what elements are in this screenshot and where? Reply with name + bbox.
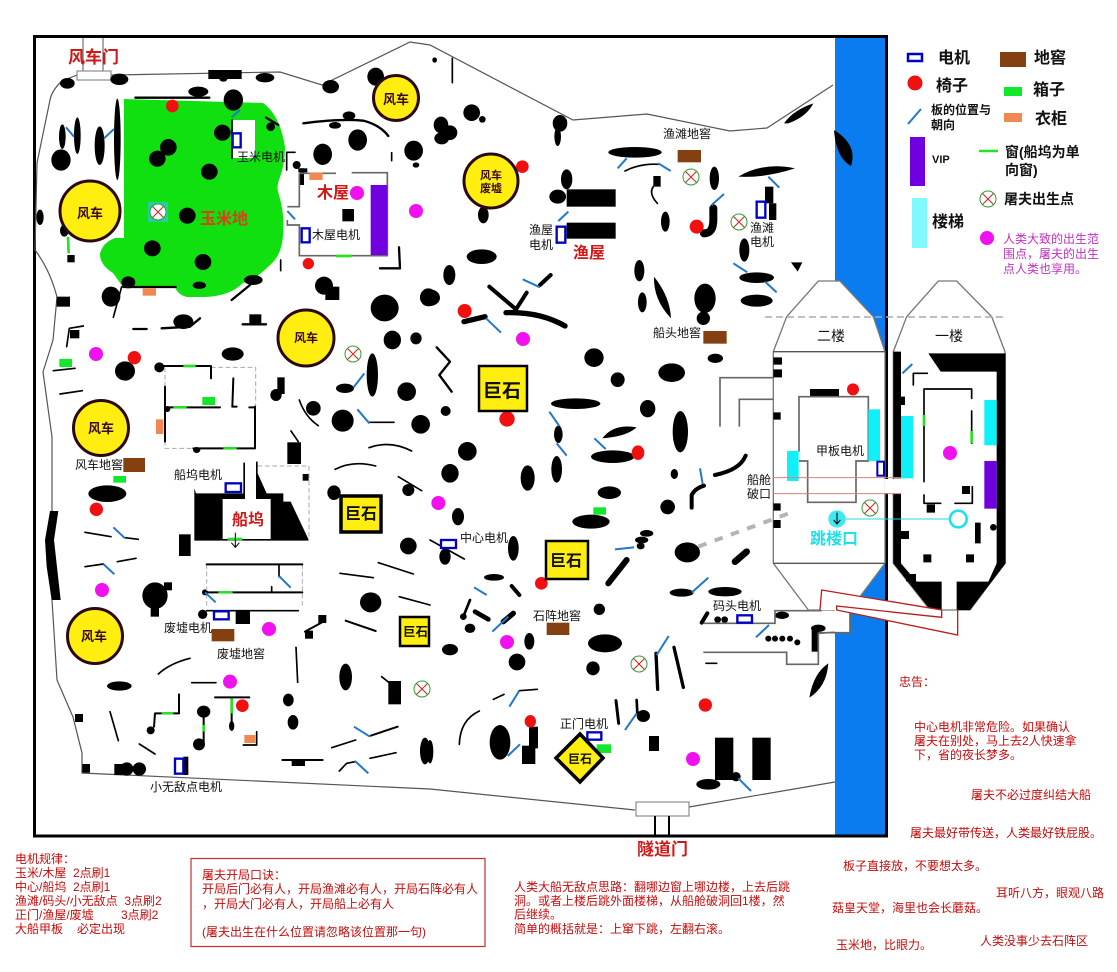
ruins cellar [212,629,234,641]
legend: generator: 电机 [938,49,970,67]
generators [587,615,752,740]
legend: VIP: VIP [932,154,950,166]
legend: chair: 椅子 [936,77,968,95]
shipyard generator [226,483,241,492]
region headings: 风车门 [68,47,119,67]
legend: plank [908,102,991,132]
map labels: 玉米电机 [237,150,285,164]
windmills [60,76,518,664]
generator rules text: 中心/船坞 2点刷1 [15,879,111,894]
legend: generator [908,49,970,67]
human ship strategy text: 后继续。 [514,908,562,922]
deck generator [877,462,884,476]
zone: south-west obstacles [75,608,430,776]
legend: human spawn: 人类大致的出生范 [1003,231,1099,246]
bridge red outline [820,590,958,635]
map frame [34,36,886,836]
split level dashed line [765,316,1004,318]
windows [68,237,352,256]
zone: north-east obstacles [420,57,813,346]
advice notes: 屠夫不必过度纠结大船 [971,787,1091,802]
boulder labels: 巨石 [403,625,428,639]
bridge corridor [821,590,958,635]
legend: crate [1004,80,1065,99]
VIP room [371,185,387,255]
map labels: 风车地窖 [75,457,123,472]
chair [236,699,249,712]
region headings: 渔屋 [573,244,605,262]
map labels: 码头电机 [713,599,761,613]
chairs [458,160,704,318]
stairs on upper deck [787,409,880,481]
generator rules text: 必定出现 [77,921,125,936]
butcher opening rhyme box [191,858,485,946]
upper deck hull [773,281,885,610]
legend: chair [908,76,968,95]
legend: window: 向窗) [1005,162,1038,178]
legend: stairs [912,198,964,248]
boulder labels [345,381,592,766]
map labels: 电机 [750,235,774,249]
map labels: 一楼 [935,328,963,344]
chairs [90,351,141,516]
jump hole lower [950,511,967,527]
region headings: 船坞 [232,510,264,529]
tunnel gate [636,802,689,835]
windmill labels [77,92,502,644]
map labels: 电机 [529,238,553,252]
planks [66,110,295,219]
region headings: 隧道门 [637,839,688,859]
locker [244,735,255,743]
legend: window [979,144,1080,178]
dashed building outlines [165,367,309,607]
butcher opening rhyme box: 开局后门必有人，开局渔滩必有人，开局石阵必有人 [202,881,478,896]
centre generator [441,540,456,548]
region headings: 玉米地 [200,210,248,228]
map labels: 废墟地窖 [217,646,265,661]
wooden hut walls [287,173,387,256]
legend: crate: 箱子 [1033,80,1065,99]
generator rules text: 正门/渔屋/废墟 [15,907,94,922]
region headings [68,47,858,859]
legend: stairs: 楼梯 [932,213,964,231]
region headings: 木屋 [317,184,349,202]
butcher spawn points [148,169,878,697]
locker [156,419,163,434]
zone: west obstacles and buildings [45,347,430,612]
region headings: 跳楼口 [810,530,858,548]
chairs [166,100,314,269]
windmill labels: 风车 [480,168,502,182]
crate [597,744,611,753]
windows [162,698,232,732]
advice notes [832,675,1104,952]
corn field [100,99,285,297]
map boundary line [35,42,835,810]
VIP on lower deck [984,461,997,509]
map labels: 小无敌点电机 [150,779,222,794]
breach lines [773,478,901,494]
crate [593,507,606,515]
leaf rock in sea [834,130,853,166]
ship [720,281,1006,635]
map labels: 破口 [747,486,771,501]
stairs on lower deck [901,400,997,478]
generators [175,611,229,774]
human spawn on lower deck [943,446,957,460]
zone: centre obstacles [430,347,747,597]
lockers [143,173,323,296]
planks [474,412,708,595]
generators [557,202,765,243]
butcher opening rhyme box: ，开局大门必有人，开局船上必有人 [202,896,394,911]
windmill labels: 风车 [88,421,114,436]
generator rules text: 3点刷2 [121,908,159,922]
planks [492,617,769,791]
human spawns [89,347,109,597]
legend: plank: 朝向 [931,117,955,132]
windmill labels: 风车 [81,629,107,644]
legend: window: 窗(船坞为单 [1005,144,1080,160]
map labels: 船坞电机 [174,467,222,482]
map labels: 二楼 [817,328,845,344]
pier walls [703,611,835,664]
human spawns [350,186,423,218]
pier dock fill [835,610,850,633]
map labels: 渔滩地窖 [663,126,711,141]
legend: butcher spawn: 屠夫出生点 [1004,191,1074,207]
generator rules text: 大船甲板 [15,922,63,936]
windmill labels: 风车 [383,92,409,107]
legend: plank: 板的位置与 [931,102,991,117]
generator rules text [15,851,162,936]
one-way arrow [231,533,239,547]
generator rules text: 电机规律： [15,851,75,866]
boulder labels: 巨石 [568,752,592,766]
advice notes: 板子直接放，不要想太多。 [843,858,987,873]
windmill labels: 风车 [294,330,318,345]
zone: north-west obstacles [36,68,437,349]
map labels: 木屋电机 [312,228,360,242]
boulder labels: 巨石 [550,553,582,570]
human spawn [516,332,530,346]
advice notes: 玉米地，比眼力。 [836,938,932,952]
legend: human spawn [980,231,1099,276]
legend: cellar: 地窖 [1034,48,1066,67]
boulder labels: 巨石 [483,381,521,402]
map labels [75,126,963,794]
generator rules text: 玉米/木屋 2点刷1 [15,866,111,880]
legend: human spawn: 围点，屠夫的出生 [1003,246,1099,261]
boulder labels: 巨石 [345,506,377,523]
broken wall to ship dashes [698,512,793,547]
map labels: 渔滩 [750,221,774,235]
legend: locker [1004,109,1067,128]
advice notes: 下，省的夜长梦多。 [914,747,1022,762]
human ship strategy text: 人类大船无敌点思路：翻哪边窗上哪边楼，上去后跳 [514,879,790,894]
legend: cellar [1000,48,1066,67]
human spawns [223,622,276,689]
windmill gate [77,38,111,80]
map labels: 船舱 [747,473,771,487]
planks [354,727,370,773]
lower deck hull [893,281,1005,610]
map labels: 甲板电机 [816,444,864,458]
chairs [499,411,644,590]
map labels: 渔屋 [529,223,553,237]
advice notes: 屠夫在别处，马上去2人快速拿 [914,733,1077,748]
upper deck pillars [773,357,839,528]
corn shed [233,120,255,158]
stone circle cellar [547,623,569,635]
human spawn [431,496,445,510]
planks [486,158,779,333]
upper deck walls [720,378,868,502]
advice notes: 忠告： [899,675,935,689]
butcher opening rhyme box: 屠夫开局口诀： [202,868,286,882]
advice notes: 菇皇天堂，海里也会长蘑菇。 [832,900,988,915]
advice notes: 耳听八方，眼观八路 [996,885,1104,900]
shipyard building [194,462,308,541]
lower deck inner walls [913,373,972,503]
jump connection line [843,517,950,520]
windmill cellar [123,458,145,472]
map labels: 石阵地窖 [533,608,581,623]
map labels: 船头地窖 [653,325,701,340]
human ship strategy text: 洞。或者上楼后跳外面楼梯，从船舱破洞回1楼，然 [514,893,785,908]
generator rules text: 渔滩/码头/小无敌点 3点刷2 [15,893,162,908]
legend [908,48,1099,276]
sea strip [835,38,885,835]
legend: human spawn: 点人类也享用。 [1003,261,1087,276]
chairs [525,698,712,728]
lower deck black walls [893,352,1006,610]
map labels: 正门电机 [560,716,608,731]
windows [173,366,242,592]
legend: locker: 衣柜 [1035,109,1067,128]
advice notes: 中心电机非常危险。如果确认 [914,719,1070,734]
legend: VIP [910,137,950,186]
windmill labels: 废墟 [480,181,502,195]
advice notes: 屠夫最好带传送，人类最好铁屁股。 [910,825,1102,840]
ship breach opening [884,479,901,493]
cellars [678,150,727,344]
map labels: 中心电机 [460,530,508,545]
crates [59,359,215,483]
zone: south-east obstacles [427,600,835,791]
deck chair [847,383,859,395]
human spawns [500,635,700,766]
map labels: 废墟电机 [164,620,212,635]
human ship strategy text: 简单的概括就是：上窜下跳，左翻右滚。 [514,921,730,936]
jump hole upper [828,510,846,528]
human ship strategy text [514,879,790,936]
butcher opening rhyme box: (屠夫出生在什么位置请忽略该位置那一句) [202,924,426,939]
advice notes: 人类没事少去石阵区 [980,933,1088,948]
boulders [341,366,603,782]
planks [103,373,369,602]
windmill labels: 风车 [77,206,103,221]
generators [233,133,310,242]
